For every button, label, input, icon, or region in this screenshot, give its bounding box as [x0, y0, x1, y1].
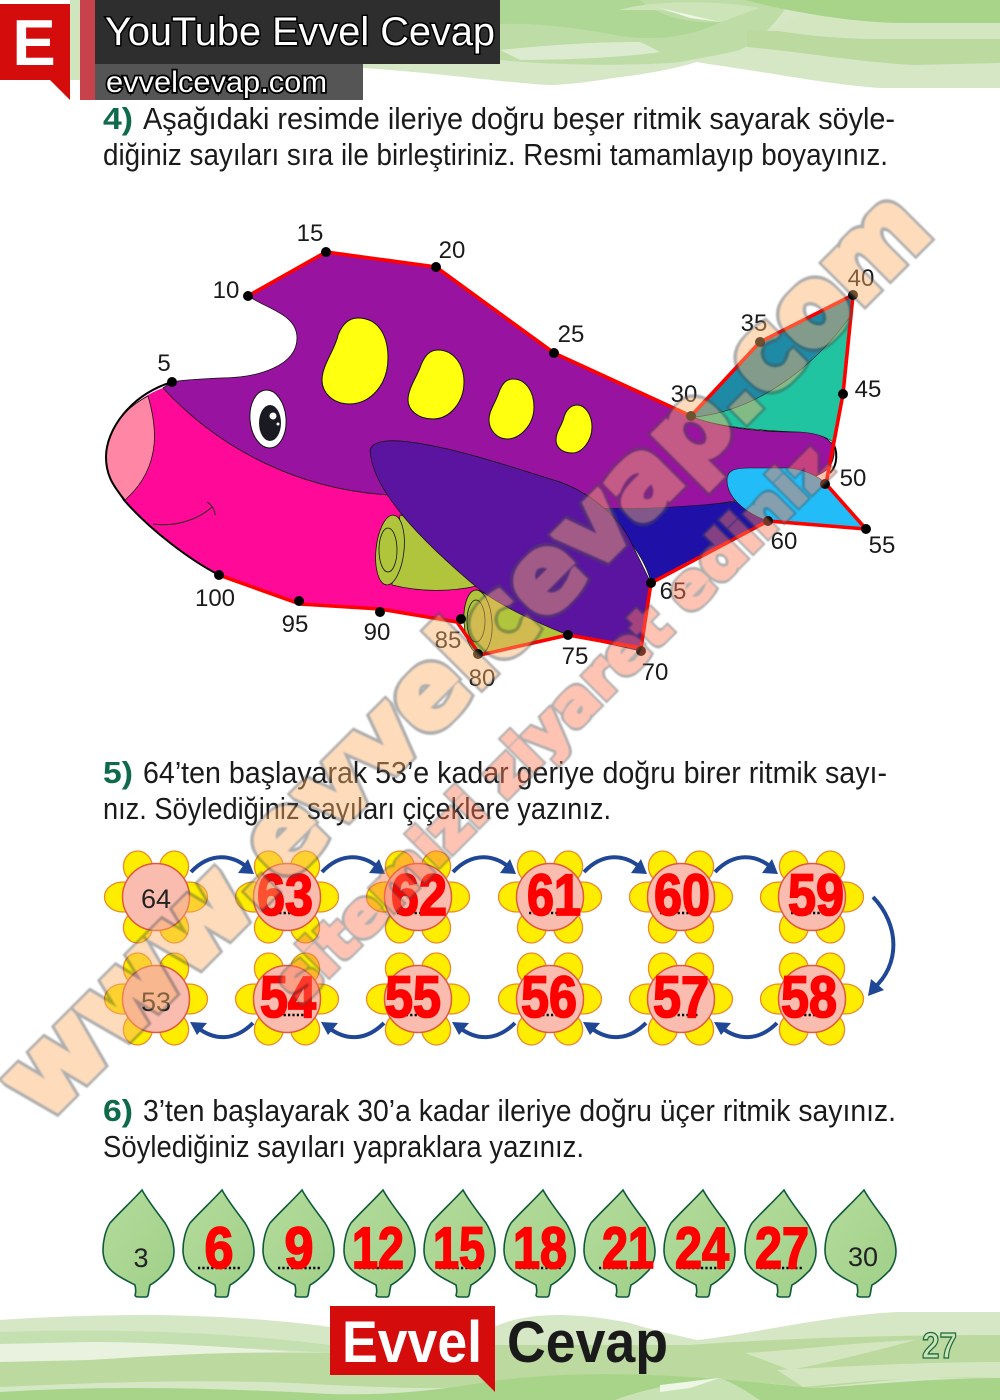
flower given numbers: 64: [141, 884, 171, 914]
dot labels: 45: [855, 376, 881, 403]
airplane dot-to-dot picture: [106, 220, 895, 692]
dot labels: [157, 220, 895, 692]
leaf answers: 18: [513, 1216, 567, 1281]
leaf answers: 9: [284, 1216, 314, 1281]
flowers: [104, 849, 864, 1047]
flower answers: 63: [257, 863, 313, 928]
plane: tail fin: [693, 300, 851, 442]
dot labels: 55: [869, 532, 895, 559]
tail tip outline: [830, 442, 836, 473]
leaves: [103, 1190, 896, 1297]
leaf answers: 15: [433, 1216, 485, 1281]
plane: pink belly: [106, 388, 520, 622]
red connecting line: [219, 252, 866, 655]
footer logo: Evvel: [342, 1310, 482, 1375]
watermark: website address: evvelcevap.com: [217, 167, 952, 902]
flower answers: 59: [788, 863, 844, 928]
dot labels: 40: [848, 265, 874, 292]
leaf answers: 24: [675, 1216, 729, 1281]
flower answers: 54: [260, 965, 316, 1030]
leaf answers: 12: [352, 1216, 404, 1281]
dot labels: 90: [364, 619, 390, 646]
leaf given numbers: 3: [133, 1243, 149, 1273]
header: red bookmark logo: [0, 4, 70, 100]
header: channel banner: evvelcevap.com: [106, 66, 327, 99]
leaf answers: 27: [755, 1216, 809, 1281]
arrows between flowers: [190, 857, 893, 1037]
dot labels: 95: [282, 611, 308, 638]
leaf answers: 21: [602, 1216, 654, 1281]
footer logo: [330, 1306, 668, 1392]
flower answers: 56: [521, 965, 577, 1030]
plane: engine one: [372, 514, 477, 590]
flower answers: 58: [781, 965, 837, 1030]
question 4 text: diğiniz sayıları sıra ile birleştiriniz. Resmi tamamlayıp boyayınız.: [103, 137, 888, 172]
footer logo: Cevap: [507, 1310, 668, 1375]
dot labels: 35: [741, 310, 767, 337]
dot labels: 30: [671, 381, 697, 408]
flower answers: 61: [527, 863, 581, 928]
dot labels: 25: [558, 321, 584, 348]
dot labels: 60: [771, 528, 797, 555]
dot labels: 15: [297, 220, 323, 247]
leaf given numbers: 30: [848, 1242, 878, 1272]
plane: rear stabiliser: [727, 468, 866, 529]
dot labels: 100: [195, 585, 235, 612]
plane: windows: [322, 318, 592, 453]
leaf answers: 6: [204, 1216, 234, 1281]
question 6 text: Söylediğiniz sayıları yapraklara yazınız.: [103, 1129, 584, 1164]
dot labels: 70: [642, 659, 668, 686]
leaf answers: [204, 1216, 809, 1281]
question 4 text: Aşağıdaki resimde ileriye doğru beşer ritmik sayarak söyle-: [143, 101, 895, 136]
flower given numbers: 53: [141, 987, 171, 1017]
question 6 text: 3’ten başlayarak 30’a kadar ileriye doğru üçer ritmik sayınız.: [143, 1093, 896, 1128]
dot labels: 75: [562, 643, 588, 670]
question 4 text: [103, 101, 895, 172]
dot labels: 50: [840, 465, 866, 492]
numbered dots: [167, 247, 871, 659]
watermark: visit message: sitemizi ziyaret ediniz: [261, 431, 845, 1015]
top green wave background: [70, 0, 1000, 88]
plane: nose: [106, 396, 154, 500]
page number: 27: [922, 1325, 957, 1366]
plane: engine two: [462, 589, 568, 655]
flower answers: 55: [385, 965, 441, 1030]
watermark: website address: [0, 164, 953, 1142]
dot labels: 5: [157, 350, 171, 377]
plane: purple upper body: [163, 252, 834, 509]
flower answers: 60: [654, 863, 710, 928]
header: red bookmark logo: E: [12, 6, 56, 79]
flower given numbers: [141, 884, 171, 1017]
plane: eye: [248, 389, 288, 449]
header: channel banner: YouTube Evvel Cevap: [105, 10, 495, 54]
plane: smile: [153, 502, 215, 525]
flower chain: [104, 849, 893, 1047]
dot labels: 85: [435, 627, 461, 654]
leaf row: [103, 1190, 896, 1297]
question 6 text: 6): [103, 1093, 133, 1128]
header: channel banner: [80, 0, 500, 100]
dot labels: 65: [660, 578, 686, 605]
flower answers: 62: [391, 863, 447, 928]
question 4 text: 4): [103, 101, 133, 136]
dot labels: 80: [469, 665, 495, 692]
leaf given numbers: [133, 1242, 878, 1273]
bottom green wave background: [0, 1312, 1000, 1400]
question 5 text: [103, 755, 887, 826]
leaf dotted lines: [198, 1267, 802, 1269]
flower answers: 57: [653, 965, 709, 1030]
flower dotted lines: [266, 913, 829, 1015]
nose outline: [106, 382, 219, 575]
plane: wing: [370, 441, 651, 651]
question 5 text: nız. Söylediğiniz sayıları çiçeklere yazınız.: [103, 791, 611, 826]
plane: dark blue underside: [597, 501, 768, 583]
question 5 text: 64’ten başlayarak 53’e kadar geriye doğru birer ritmik sayı-: [143, 755, 887, 790]
dot labels: 20: [439, 237, 465, 264]
flower answers: [257, 863, 844, 1030]
dot labels: 10: [213, 277, 239, 304]
question 6 text: [103, 1093, 896, 1164]
question 5 text: 5): [103, 755, 133, 790]
plane: tail fin dark panel: [691, 295, 853, 417]
